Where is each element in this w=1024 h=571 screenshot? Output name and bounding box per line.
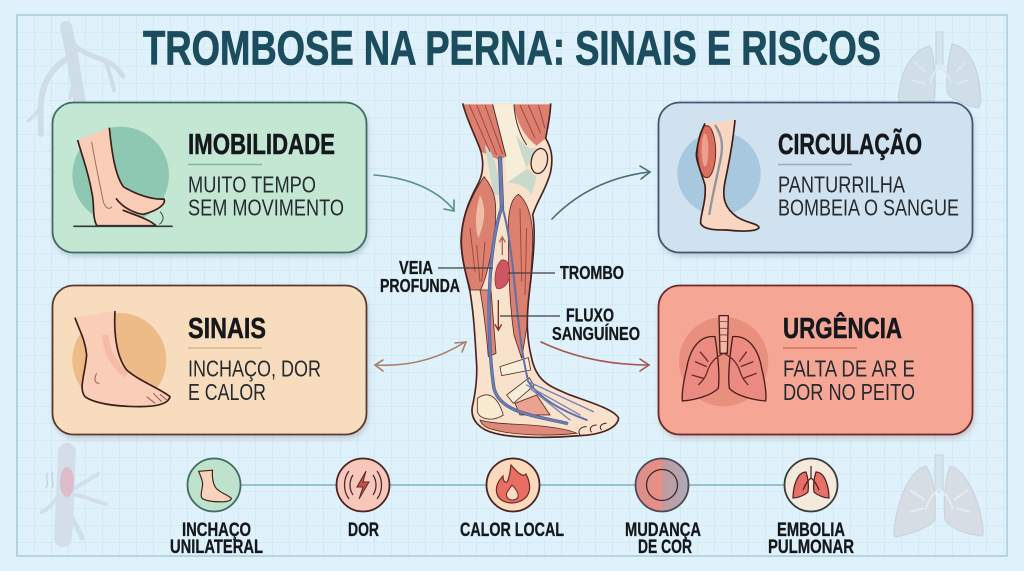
text: panturrilha bombeia o sangue	[778, 172, 959, 220]
text: muito tempo sem movimento: MUITO TEMPO	[188, 172, 316, 198]
panel: imobilidade	[52, 102, 368, 256]
label: inchaço unilateral	[170, 520, 263, 558]
label: veia profunda: PROFUNDA	[380, 276, 460, 296]
panel: sinais	[52, 286, 368, 438]
label: dor: DOR	[348, 520, 379, 541]
icon: swollen foot	[72, 311, 170, 407]
label: inchaço unilateral: INCHAÇO	[182, 520, 251, 541]
label: embolia pulmonar: EMBOLIA	[777, 520, 845, 541]
label: mudança de cor: DE COR	[638, 537, 692, 558]
panel: urgência	[658, 286, 974, 438]
icon: lungs	[679, 316, 768, 406]
label: fluxo sanguíneo: FLUXO	[566, 306, 614, 326]
heading: imobilidade: IMOBILIDADE	[188, 129, 335, 161]
kneecap	[529, 147, 550, 175]
panel: circulação	[658, 102, 974, 256]
text: inchaço, dor e calor: E CALOR	[188, 379, 266, 405]
label: embolia pulmonar: PULMONAR	[768, 537, 854, 558]
text: falta de ar e dor no peito: FALTA DE AR E	[783, 356, 915, 382]
label: veia profunda	[380, 258, 460, 296]
symptom: dor	[336, 458, 390, 541]
label: trombo: TROMBO	[560, 263, 624, 283]
label: mudança de cor	[625, 520, 701, 558]
text: muito tempo sem movimento: SEM MOVIMENTO	[188, 194, 344, 220]
text: panturrilha bombeia o sangue: BOMBEIA O SANGUE	[778, 194, 959, 220]
symptom: embolia pulmonar	[768, 458, 854, 558]
heading: sinais: SINAIS	[188, 313, 266, 345]
label: mudança de cor: MUDANÇA	[625, 520, 701, 541]
leg outline	[461, 103, 619, 437]
background icon: lungs bottom right	[894, 455, 983, 537]
label: fluxo sanguíneo: SANGUÍNEO	[552, 323, 640, 344]
text: panturrilha bombeia o sangue: PANTURRILHA	[778, 172, 906, 198]
text: falta de ar e dor no peito	[783, 356, 915, 405]
background icon: veins top left	[28, 27, 123, 134]
text: inchaço, dor e calor: INCHAÇO, DOR	[188, 356, 321, 382]
label: fluxo sanguíneo	[552, 306, 640, 344]
label: embolia pulmonar	[768, 520, 854, 558]
ankle bands and heel	[477, 358, 577, 435]
background icon: vein with clot bottom left	[42, 452, 106, 538]
icon: leg with calf muscle	[677, 120, 761, 231]
deep vein	[489, 158, 593, 423]
text: inchaço, dor e calor	[188, 356, 321, 405]
label: calor local: CALOR LOCAL	[460, 520, 564, 541]
arrow: sinais and leg	[375, 342, 466, 371]
symptom: calor local	[460, 458, 564, 541]
heading: circulação: CIRCULAÇÃO	[778, 127, 922, 161]
icon: foot flexing	[72, 127, 173, 226]
thigh muscles	[463, 104, 550, 195]
symptom timeline line	[214, 484, 811, 486]
flow arrows	[495, 237, 505, 330]
symptom: mudança de cor	[625, 458, 701, 558]
central illustration: leg anatomy	[461, 103, 619, 437]
text: muito tempo sem movimento	[188, 172, 344, 220]
arrow: imobilidade to leg	[374, 175, 454, 211]
symptom: inchaço unilateral	[170, 458, 263, 558]
background icon: lungs top right	[898, 32, 981, 108]
label: inchaço unilateral: UNILATERAL	[170, 537, 263, 558]
text: falta de ar e dor no peito: DOR NO PEITO	[783, 379, 915, 405]
arrow: leg to circulação	[552, 166, 650, 219]
heading: urgência: URGÊNCIA	[783, 311, 902, 345]
thrombus	[495, 260, 510, 289]
arrow: leg to urgência	[541, 342, 649, 371]
calf muscles	[462, 177, 533, 358]
label: veia profunda: VEIA	[399, 258, 433, 278]
leader lines	[438, 268, 560, 316]
